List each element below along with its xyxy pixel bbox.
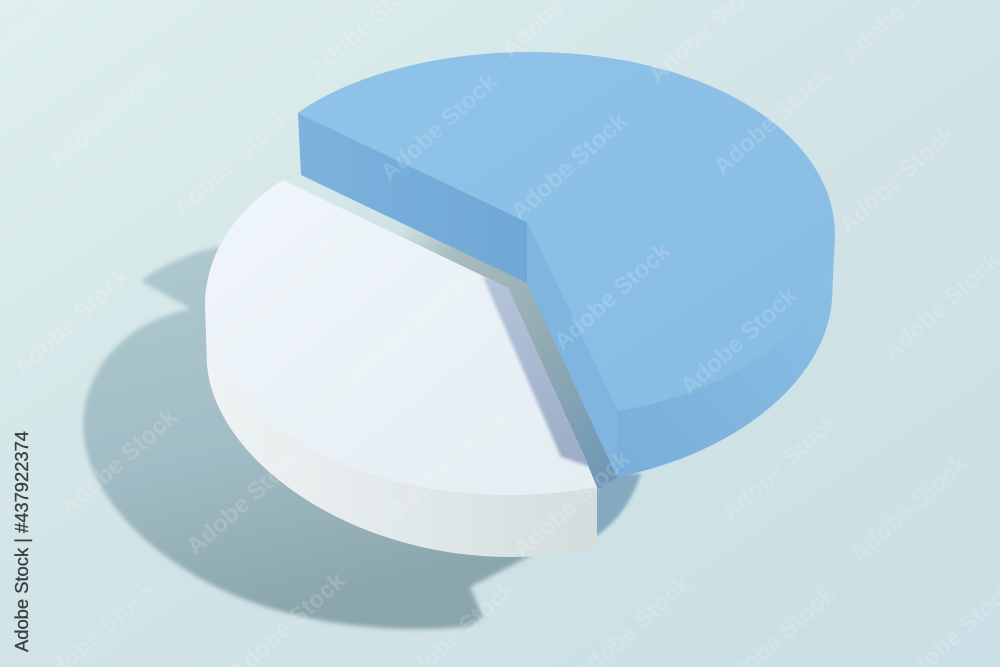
watermark pattern: Adobe Stock — [385, 405, 513, 524]
white top face — [205, 180, 597, 495]
watermark pattern: Adobe Stock — [508, 445, 636, 564]
shadow on white top — [483, 277, 600, 470]
stock brand label: Adobe Stock | — [12, 538, 32, 652]
ground shadow right of slices — [590, 470, 641, 540]
watermark pattern: Adobe Stock — [168, 103, 296, 222]
watermark pattern: Adobe Stock — [833, 120, 961, 239]
watermark pattern: Adobe Stock — [675, 282, 803, 401]
slice: blue large — [298, 52, 835, 477]
blue top face — [298, 52, 835, 411]
watermark pattern: Adobe Stock — [343, 272, 471, 391]
gap shadow between slices — [283, 174, 618, 490]
blue inner wall right — [527, 222, 620, 477]
white outer wall — [205, 305, 597, 557]
slice: white small — [205, 180, 600, 557]
watermark pattern: Adobe Stock — [8, 263, 136, 382]
watermark pattern: Adobe Stock — [375, 68, 503, 187]
watermark pattern: Adobe Stock — [716, 408, 844, 527]
watermark pattern: Adobe Stock — [708, 62, 836, 181]
ground shadow — [83, 247, 560, 629]
watermark pattern: Adobe Stock — [55, 403, 183, 522]
watermark pattern: Adobe Stock — [43, 57, 171, 176]
watermark pattern: Adobe Stock — [505, 107, 633, 226]
blue outer wall — [617, 235, 835, 477]
watermark pattern: Adobe Stock — [215, 230, 343, 349]
watermark pattern: Adobe Stock — [548, 237, 676, 356]
watermark pattern: Adobe Stock — [845, 450, 973, 569]
watermark pattern: Adobe Stock — [181, 442, 309, 561]
blue inner wall left — [298, 113, 527, 283]
stock id label: #437922374 — [12, 431, 32, 533]
